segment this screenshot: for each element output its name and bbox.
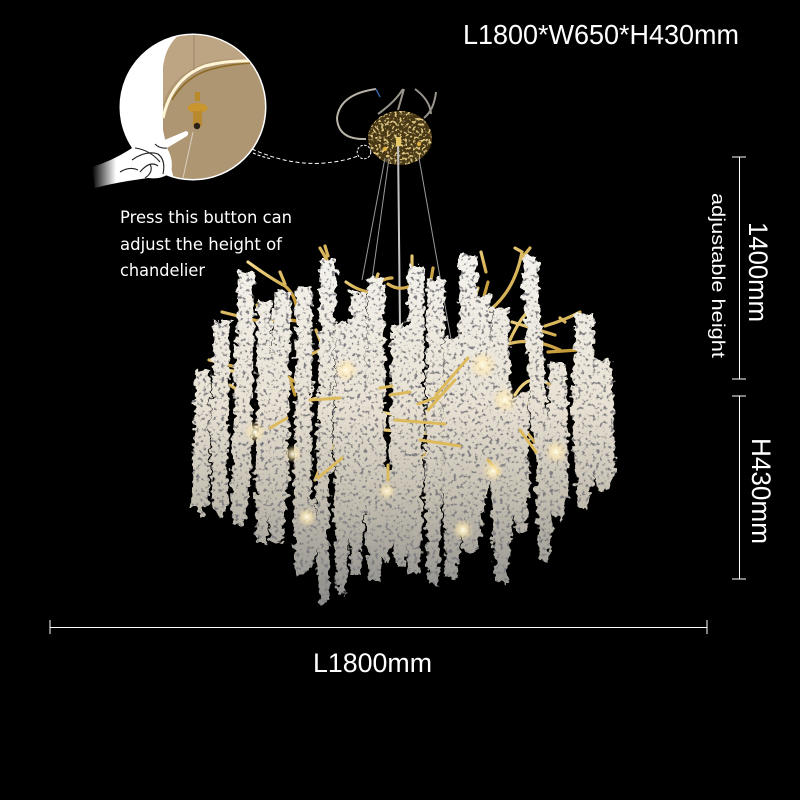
dimension: adjustable height 1400mm: adjustable height: [708, 193, 729, 358]
text: button note: chandelier: [120, 261, 205, 280]
text: button note: [120, 208, 292, 280]
dimension: length L1800mm: L1800mm: [313, 648, 432, 678]
lights: [244, 351, 568, 541]
title: overall dimensions: L1800*W650*H430mm: [463, 19, 739, 50]
dimension: adjustable height 1400mm: 1400mm: [743, 222, 773, 322]
text: button note: adjust the height of: [120, 235, 283, 254]
dimension: length L1800mm: [50, 620, 707, 678]
gold branches: [209, 246, 580, 480]
icon: pointing hand: [92, 131, 188, 188]
inset: detail of height adjust button: [92, 30, 275, 188]
crystal strands: [193, 257, 614, 604]
dimension: adjustable height 1400mm: [708, 157, 773, 379]
icon: hanger button: [183, 92, 208, 178]
dimension: body height H430mm: [732, 396, 776, 579]
gold accents over crystals: [270, 358, 536, 480]
leader: dashed line from inset to ceiling plate: [252, 145, 371, 163]
dimension: body height H430mm: H430mm: [746, 438, 776, 544]
text: button note: Press this button can: [120, 208, 292, 227]
ceiling plate and wires: [337, 89, 452, 345]
